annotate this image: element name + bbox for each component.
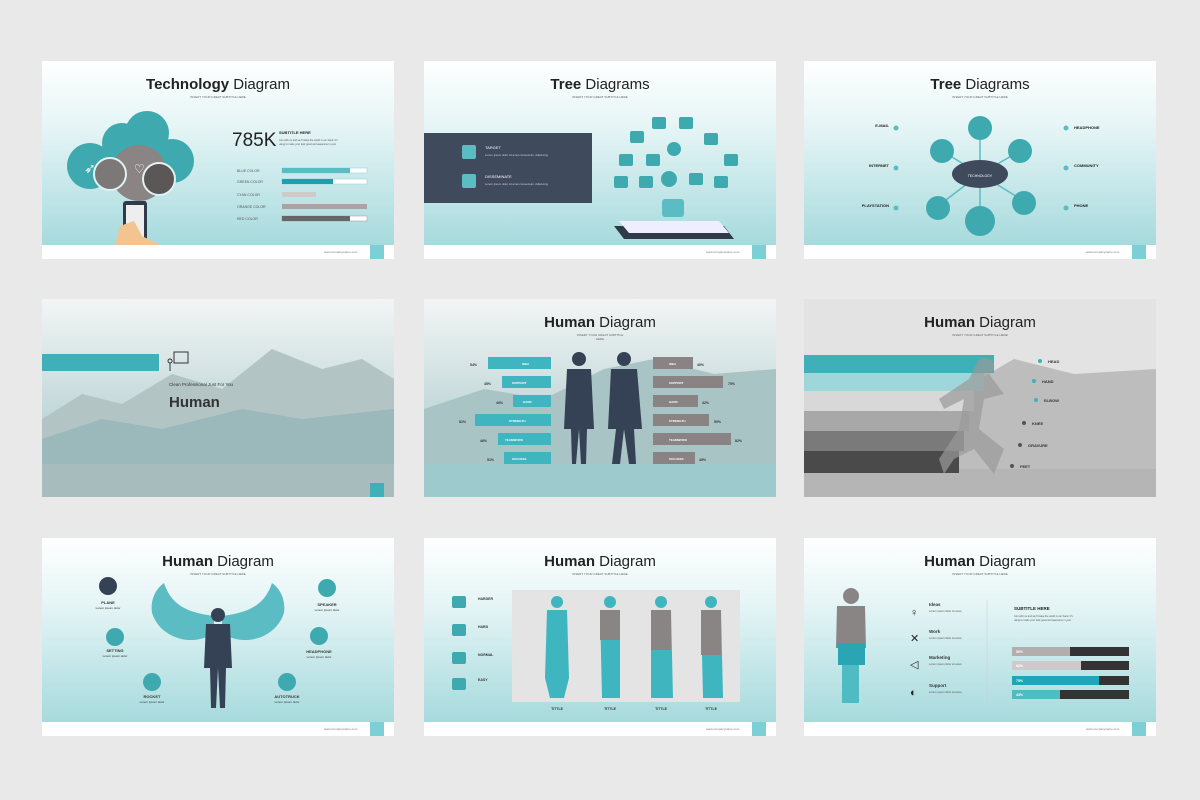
right bars: SUPPORT (669, 381, 684, 385)
right items: HEADPHONE (306, 649, 332, 654)
right items: Lorem ipsum dolor (315, 608, 339, 612)
hand with phone (112, 201, 167, 259)
title (544, 314, 656, 341)
right bars: 50% (714, 420, 722, 424)
heading text: Human (169, 394, 220, 411)
slide 3: Tree Diagrams network: TECHNOLOGY (968, 174, 993, 178)
heading text: Clean Professional Just For You (169, 382, 234, 387)
left items: Lorem ipsum dolor (103, 654, 127, 658)
left bars: SUCCESS (512, 457, 527, 461)
title: INSERT YOUR GREAT SUBTITLE HERE (190, 95, 246, 99)
left bars: STRENGTH (509, 419, 526, 423)
labels: ELBOW (1044, 398, 1059, 403)
title: Tree Diagrams (550, 76, 650, 93)
stat 785K: Join with us and we'll make the world in our hand. It's (279, 139, 339, 142)
dark info panel: Lorem ipsum dolor sit amet consectetur. Adipiscing (485, 153, 548, 157)
bands (804, 355, 994, 473)
right labels (1074, 125, 1100, 208)
left icon scale: HARDER (478, 597, 493, 601)
right bars: SUCCESS (669, 457, 684, 461)
silhouettes (545, 596, 723, 698)
bars (237, 168, 367, 221)
slide 7: Human Diagram wings (42, 538, 394, 736)
left bars: 54% (470, 363, 478, 367)
labels: HEAD (1048, 359, 1059, 364)
labels: TITTLE (551, 707, 564, 711)
items list (910, 602, 962, 699)
presenter icon (168, 352, 188, 371)
title: INSERT YOUR GREAT SUBTITLE HERE (952, 333, 1008, 337)
left icon scale: HARD (478, 625, 489, 629)
slide 3: Tree Diagrams network: www.companyname.com (1086, 250, 1120, 254)
left items: Lorem ipsum dolor (140, 700, 164, 704)
stat 785K: 785K (232, 130, 277, 151)
items list: ◁ (910, 659, 919, 671)
network diagram (938, 128, 1024, 221)
subtitle block: SUBTITLE HERE (1014, 606, 1050, 611)
items list: ◐ (910, 687, 917, 699)
items list: Lorem ipsum dolor sit amet, (929, 662, 962, 666)
items list: ♀ (910, 607, 918, 619)
cloud icon group (67, 111, 194, 241)
items list: Work (929, 629, 941, 634)
slide 9: Human Diagram stats: www.companyname.com (1086, 727, 1120, 731)
left bars: 45% (484, 382, 492, 386)
title: Human Diagram (924, 314, 1036, 331)
left items (96, 577, 164, 704)
left bars: HARD (523, 400, 532, 404)
right labels: HEADPHONE (1074, 125, 1100, 130)
slide 9: Human Diagram stats (804, 538, 1156, 736)
right bars: IDEA (669, 362, 677, 366)
title: Human Diagram (162, 553, 274, 570)
labels (551, 707, 718, 711)
bars: ORANGE COLOR (237, 205, 266, 209)
left items: Lorem ipsum dolor (96, 606, 120, 610)
labels: FEET (1020, 464, 1031, 469)
right bars: 82% (735, 439, 743, 443)
title: INSERT YOUR GREAT SUBTITLE HERE (952, 95, 1008, 99)
slide 8: Human Diagram silhouettes: www.companyname.com (706, 727, 740, 731)
subtitle block: using to make your look good and awesome in your (1014, 619, 1071, 622)
left labels: PLAYSTATION (862, 203, 889, 208)
title: INSERT YOUR GREAT SUBTITLE HERE (572, 572, 628, 576)
left bars: 40% (496, 401, 504, 405)
bar chart: 62% (1016, 664, 1024, 668)
slide 6: Human Diagram runner (804, 314, 1156, 497)
slide 1: Technology Diagram: www.companyname.com (324, 250, 358, 254)
items list: Support (929, 683, 947, 688)
left bars: 46% (480, 439, 488, 443)
labels: KNEE (1032, 421, 1043, 426)
items list: Lorem ipsum dolor sit amet, (929, 636, 962, 640)
cloud icon group: ➶ (84, 160, 96, 176)
right bars: 75% (728, 382, 736, 386)
right bars: 42% (702, 401, 710, 405)
title: Human Diagram (924, 553, 1036, 570)
runner (939, 358, 1004, 474)
title: HERE (596, 337, 604, 341)
slide 3: Tree Diagrams network (804, 61, 1156, 259)
right bars (653, 357, 743, 464)
left icon scale: NORMAL (478, 653, 494, 657)
labels: TITTLE (655, 707, 668, 711)
right bars: HARD (669, 400, 678, 404)
left icon scale: EASY (478, 678, 488, 682)
labels: TITTLE (705, 707, 718, 711)
right bars: 40% (697, 363, 705, 367)
bars: GREEN COLOR (237, 180, 263, 184)
slide 5: Human Diagram bars (424, 299, 776, 497)
dark info panel: DISSEMINATE (485, 174, 512, 179)
labels: GRAVURE (1028, 443, 1048, 448)
right bars: 40% (699, 458, 707, 462)
items list: Ideas (929, 602, 941, 607)
title: Tree Diagrams (930, 76, 1030, 93)
title: INSERT YOUR GREAT SUBTITLE HERE (190, 572, 246, 576)
stat 785K: using to make your look good and awesome in your (279, 143, 336, 146)
slide 4: Human cover (42, 299, 394, 497)
left bars: 51% (487, 458, 495, 462)
title: Human Diagram (544, 553, 656, 570)
title: Technology Diagram (146, 76, 290, 93)
right items: Lorem ipsum dolor (275, 700, 299, 704)
items list: Marketing (929, 655, 951, 660)
bars: BLUE COLOR (237, 169, 260, 173)
bar chart: 75% (1016, 679, 1024, 683)
labels (1010, 359, 1059, 469)
right items (274, 579, 339, 704)
slide 1: Technology Diagram (42, 61, 394, 259)
items list: Lorem ipsum dolor sit amet, (929, 690, 962, 694)
left labels (862, 123, 890, 208)
dark info panel: Lorem ipsum dolor sit amet consectetur. Adipiscing (485, 182, 548, 186)
heading text (169, 382, 234, 411)
teal banner (42, 354, 159, 371)
title: Human Diagram (544, 314, 656, 331)
bar chart: 43% (1016, 693, 1024, 697)
title: INSERT YOUR GREAT SUBTITLE HERE (952, 572, 1008, 576)
left items: PLANE (101, 600, 115, 605)
title: INSERT YOUR GREAT SUBTITLE HERE (572, 95, 628, 99)
right bars: STRENGTH (669, 419, 686, 423)
tablet with icons tree (614, 117, 738, 239)
right labels: PHONE (1074, 203, 1089, 208)
left bars: IDEA (522, 362, 530, 366)
title: INSERT YOUR GREAT SUBTITLE (577, 333, 623, 337)
slide 2: Tree Diagrams panel: www.companyname.com (706, 250, 740, 254)
mountains (42, 349, 394, 497)
woman silhouette (836, 588, 866, 703)
left bars: TEAMWORK (505, 438, 524, 442)
right items: Lorem ipsum dolor (307, 655, 331, 659)
left bars: SUPPORT (512, 381, 527, 385)
subtitle block: Join with us and we'll make the world in our hand. It's (1014, 615, 1074, 618)
stat 785K (232, 130, 339, 151)
dark info panel: TARGET (485, 145, 501, 150)
left items: SETTING (106, 648, 124, 653)
stat 785K: SUBTITLE HERE (279, 130, 311, 135)
left bars (459, 357, 551, 464)
labels: HAND (1042, 379, 1054, 384)
left labels: INTERNET (869, 163, 890, 168)
slide 8: Human Diagram silhouettes (424, 538, 776, 736)
right items: AUTOTRUCK (274, 694, 300, 699)
labels: TITTLE (604, 707, 617, 711)
right items: SPEAKER (317, 602, 337, 607)
right labels: COMMUNITY (1074, 163, 1099, 168)
left bars: 81% (459, 420, 467, 424)
silhouettes (564, 352, 642, 464)
items list: Lorem ipsum dolor sit amet, (929, 609, 962, 613)
left labels: E-MAIL (875, 123, 890, 128)
items list: ✕ (910, 633, 919, 645)
bars: CYAN COLOR (237, 193, 260, 197)
left items: ROCKET (144, 694, 161, 699)
slide 2: Tree Diagrams panel (424, 61, 776, 259)
dark info panel (424, 133, 592, 203)
right bars: TEAMWORK (669, 438, 688, 442)
wings and man (152, 583, 284, 708)
left icon scale (452, 596, 494, 690)
bar chart: 50% (1016, 650, 1024, 654)
cloud icon group: ♡ (134, 162, 145, 176)
subtitle block (987, 600, 1074, 703)
slide 7: Human Diagram wings: www.companyname.com (324, 727, 358, 731)
gray panel (512, 590, 740, 702)
bars: RED COLOR (237, 217, 258, 221)
bar chart (1012, 647, 1129, 699)
